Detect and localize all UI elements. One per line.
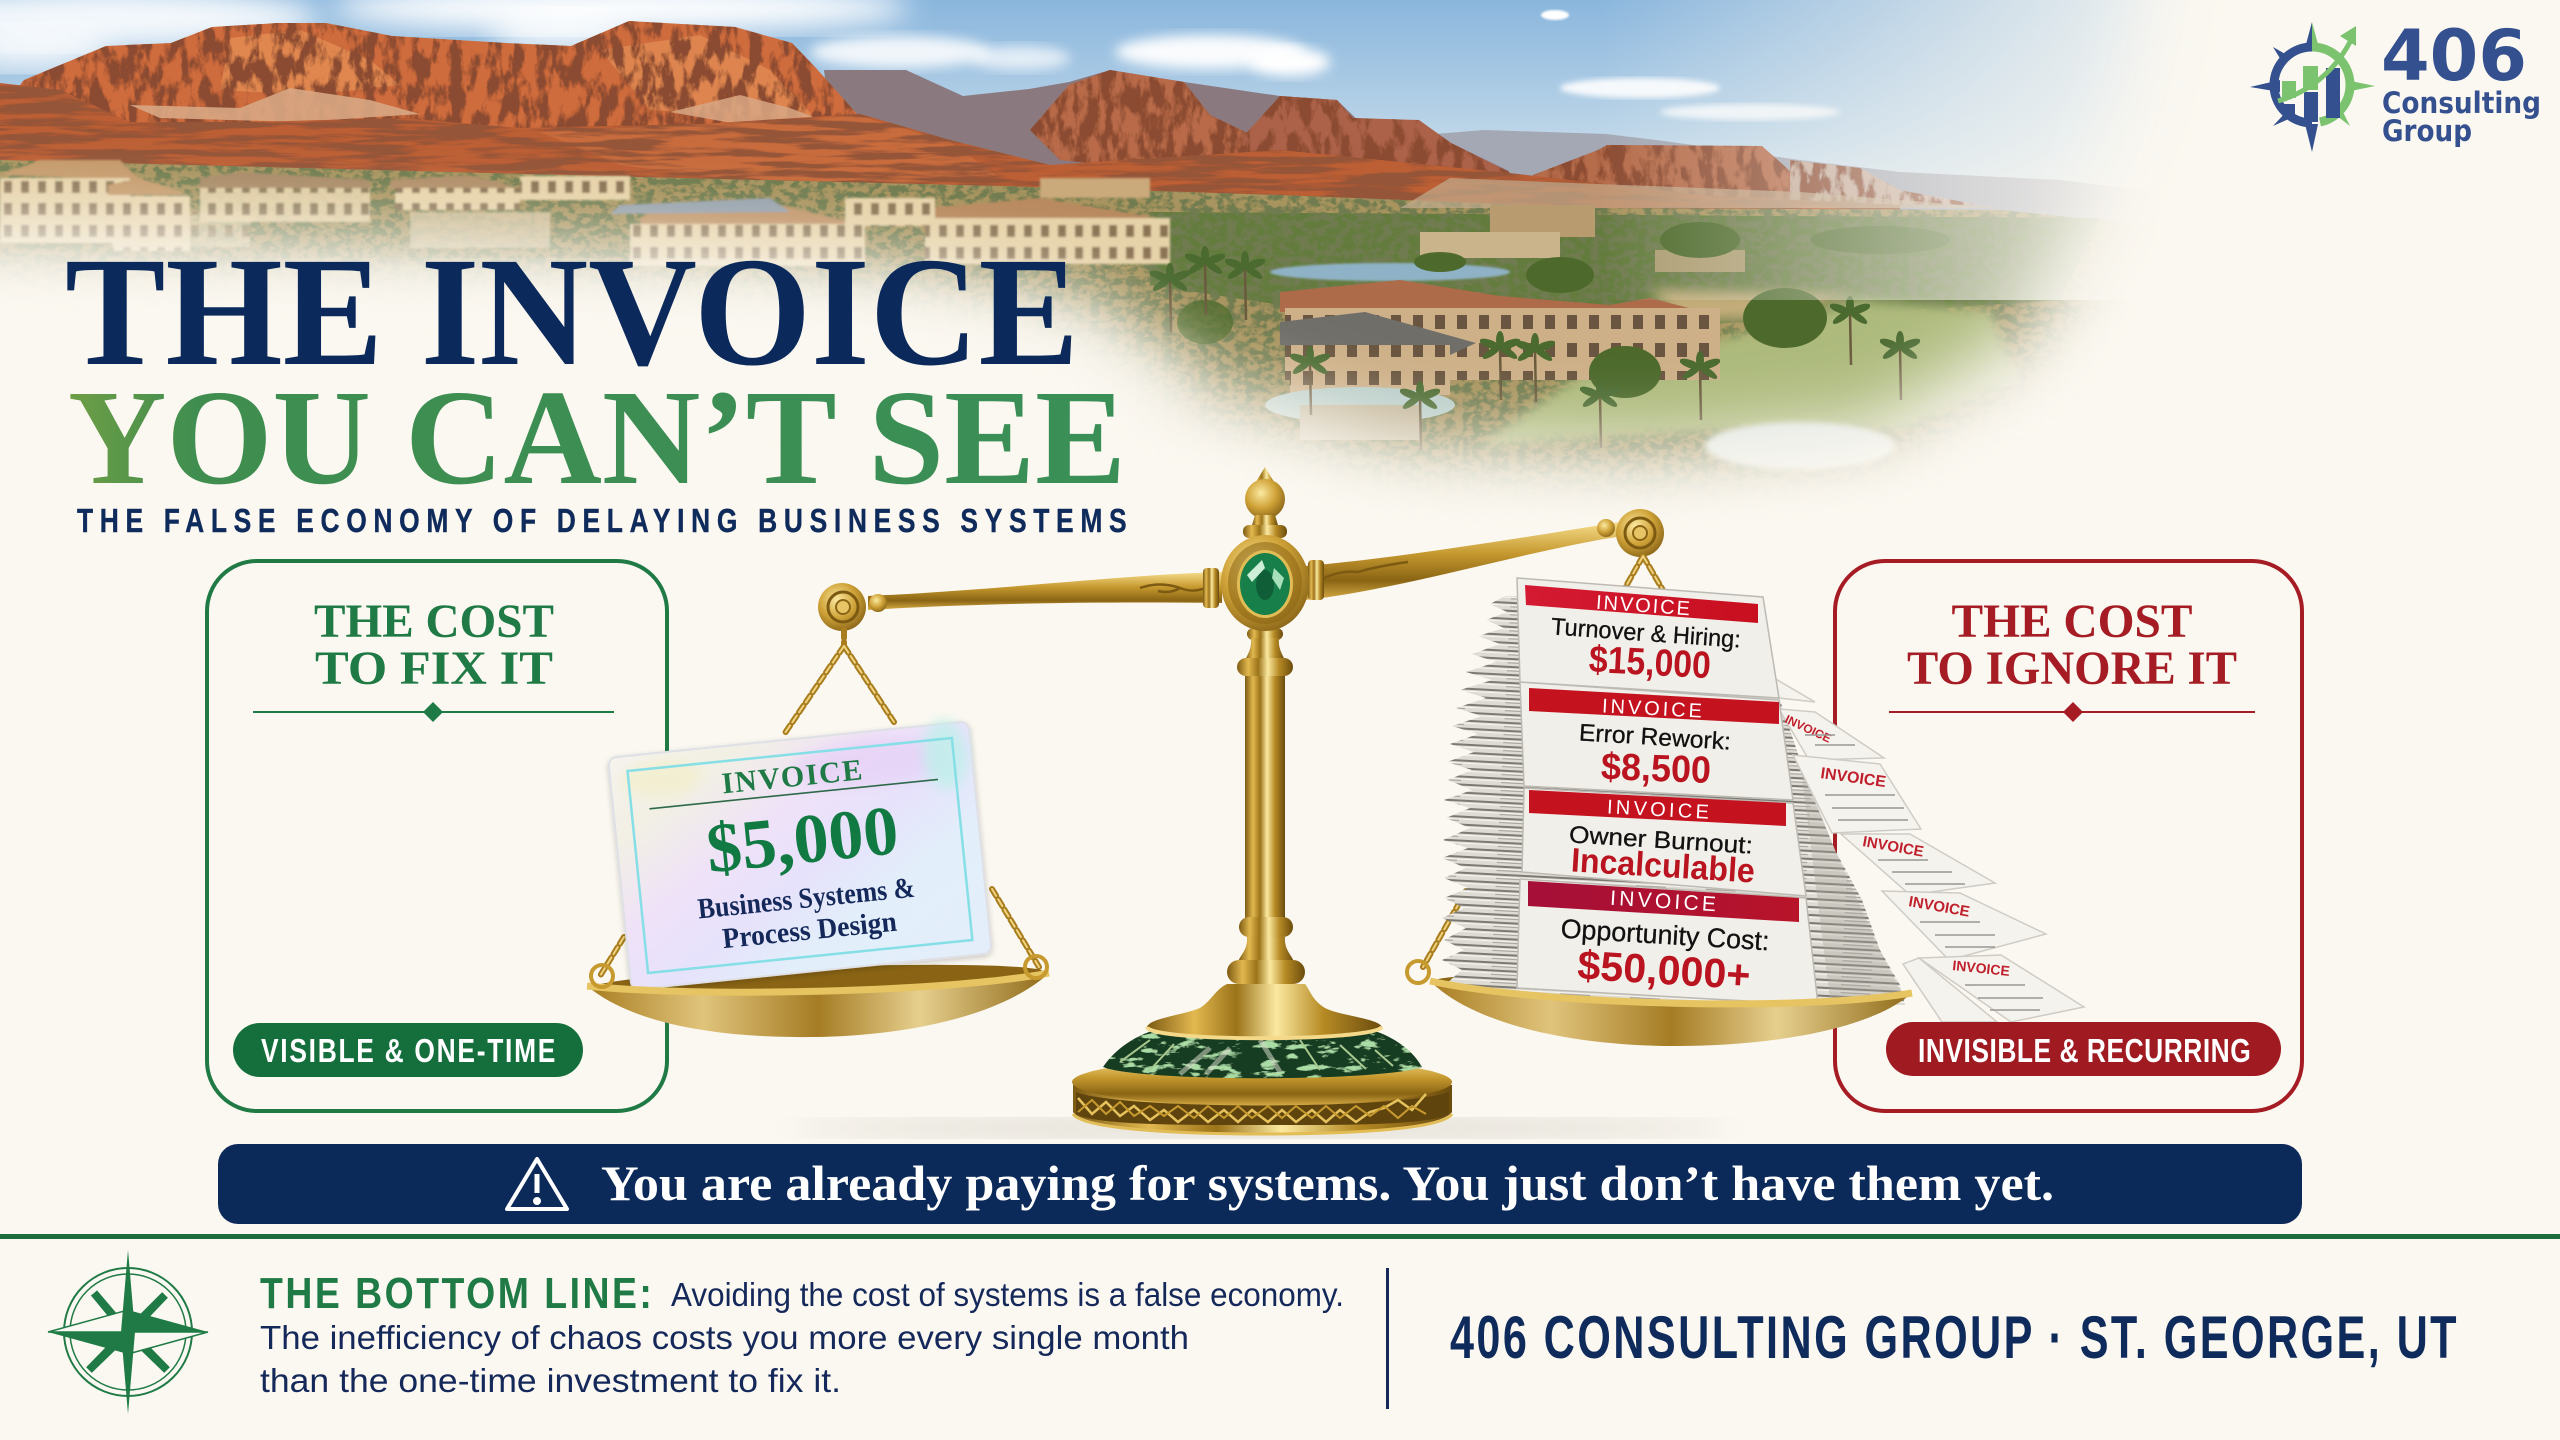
hanging invoice card: $5,000: Process Design [721,906,898,955]
invoice: opportunity cost: $50,000+ [1576,942,1752,998]
sheet 2 [1793,755,1921,833]
pill: visible and one-time [233,1023,583,1077]
sheet 2: INVOICE [1819,765,1887,791]
title: THE INVOICE [65,225,1079,398]
icon: warning triangle [507,1159,567,1209]
beam [818,509,1664,631]
logo compass mark [2250,22,2375,152]
sheet 3: INVOICE [1861,833,1925,861]
sheet 6: INVOICE [1952,957,2011,979]
pill: visible and one-time: VISIBLE & ONE-TIME [261,1033,555,1070]
title [65,225,1126,513]
clouds [0,0,1840,120]
invoice: owner burnout: INVOICE [1606,796,1709,824]
bottom line text: Avoiding the cost of systems is a false economy. [671,1276,1344,1313]
bottom line text: THE BOTTOM LINE: [260,1268,652,1318]
left gold pan [587,956,1049,1037]
lower rock band [0,83,1900,222]
heading: fix it: THE COST [314,595,554,648]
sheet 4: INVOICE [1907,893,1971,921]
invoice: turnover and hiring: $15,000 [1588,639,1712,687]
logo: 406 Consulting Group [2250,15,2541,152]
heading: fix it [314,595,554,695]
invoice: error rework [1520,682,1793,800]
landscape photo: red cliffs and resort [0,0,2156,500]
balance scale [587,467,2084,1134]
bottom line text [260,1268,1344,1399]
right pan back [1432,969,1908,1007]
main red mesa [0,21,880,175]
invoice: opportunity cost: INVOICE [1609,887,1717,916]
title fog [0,280,1200,500]
invoice: error rework: INVOICE [1601,695,1702,723]
talus slopes [130,88,420,122]
sheet 4 [1882,891,2046,960]
logo: 406 Consulting Group: Consulting [2382,86,2541,120]
stand column [1227,628,1305,984]
pill: invisible and recurring: INVISIBLE & RECURRING [1918,1033,2251,1070]
left pan back [592,959,1044,1001]
emerald hub [1203,535,1324,631]
hanging invoice card: $5,000: Business Systems & [696,872,916,926]
ground and tree belt [0,160,2104,500]
heading: ignore it: TO IGNORE IT [1907,642,2237,695]
heading: ignore it [1907,595,2237,695]
invoice: owner burnout [1522,788,1806,896]
sheet 6 [1919,955,2084,1022]
invoice: opportunity cost [1517,879,1818,1005]
palms and trees [1177,222,1950,398]
lakes [1270,263,1510,281]
paper stack [1442,596,1905,1005]
right scroll end [1597,509,1664,557]
icon: compass rose [48,1250,208,1414]
panel: the cost to fix it [207,561,667,1111]
invoice: error rework: $8,500 [1600,746,1712,792]
right chains [1423,556,1664,967]
falling invoice sheets [1774,678,2084,1022]
logo: 406 Consulting Group: Group [2382,114,2472,148]
invoice: owner burnout: Owner Burnout: [1568,821,1754,860]
hanging invoice card: $5,000: INVOICE [720,753,864,800]
left scroll end [818,583,887,631]
golf greens [1480,290,2020,445]
left resort buildings [0,160,1170,266]
footer organisation and location: 406 CONSULTING GROUP · ST. GEORGE, UT [1450,1305,2457,1372]
invoice: turnover and hiring [1517,578,1779,698]
pill: invisible and recurring [1886,1022,2281,1076]
callout text: You are already paying for systems. You just don’t have them yet. [601,1155,2054,1211]
right resort buildings [1265,205,1745,440]
sheet 5 [1903,958,1997,1022]
sheet 1: INVOICE [1783,712,1833,746]
invoice: opportunity cost: Opportunity Cost: [1560,914,1770,956]
sky [0,0,2158,182]
distant cliffs [0,21,1980,205]
hanging invoice card: $5,000 [608,717,992,990]
invoice: turnover and hiring: Turnover & Hiring: [1550,613,1742,654]
heading: fix it: TO FIX IT [315,642,553,695]
left chains [600,630,1039,976]
green divider rule [0,1234,2560,1239]
marble and gold base [1072,984,1452,1134]
sheet 3 [1841,833,1995,895]
finial [1243,467,1287,538]
floor shadow under scale [790,1119,1730,1137]
bottom line text: The inefficiency of chaos costs you more every single month [260,1319,1189,1356]
bottom line text: than the one-time investment to fix it. [260,1362,841,1399]
vertical divider [1386,1268,1389,1409]
subtitle: THE FALSE ECONOMY OF DELAYING BUSINESS SYSTEMS [77,503,1127,540]
sheet 1 [1779,709,1884,760]
panel: the cost to ignore it [1835,561,2302,1111]
hanging invoice card: $5,000: $5,000 [703,792,902,888]
callout banner [218,1144,2302,1224]
invoice: turnover and hiring: INVOICE [1595,592,1691,620]
invoice: error rework: Error Rework: [1578,719,1732,756]
heading: ignore it: THE COST [1952,595,2192,648]
logo wordmark: 406 [2381,15,2527,97]
right side cream fade [1600,0,2240,300]
right gold pan [1430,981,1912,1046]
invoice: owner burnout: Incalculable [1570,841,1756,891]
title: YOU CAN’T SEE [68,363,1126,513]
far blue ranges [1438,130,2096,218]
